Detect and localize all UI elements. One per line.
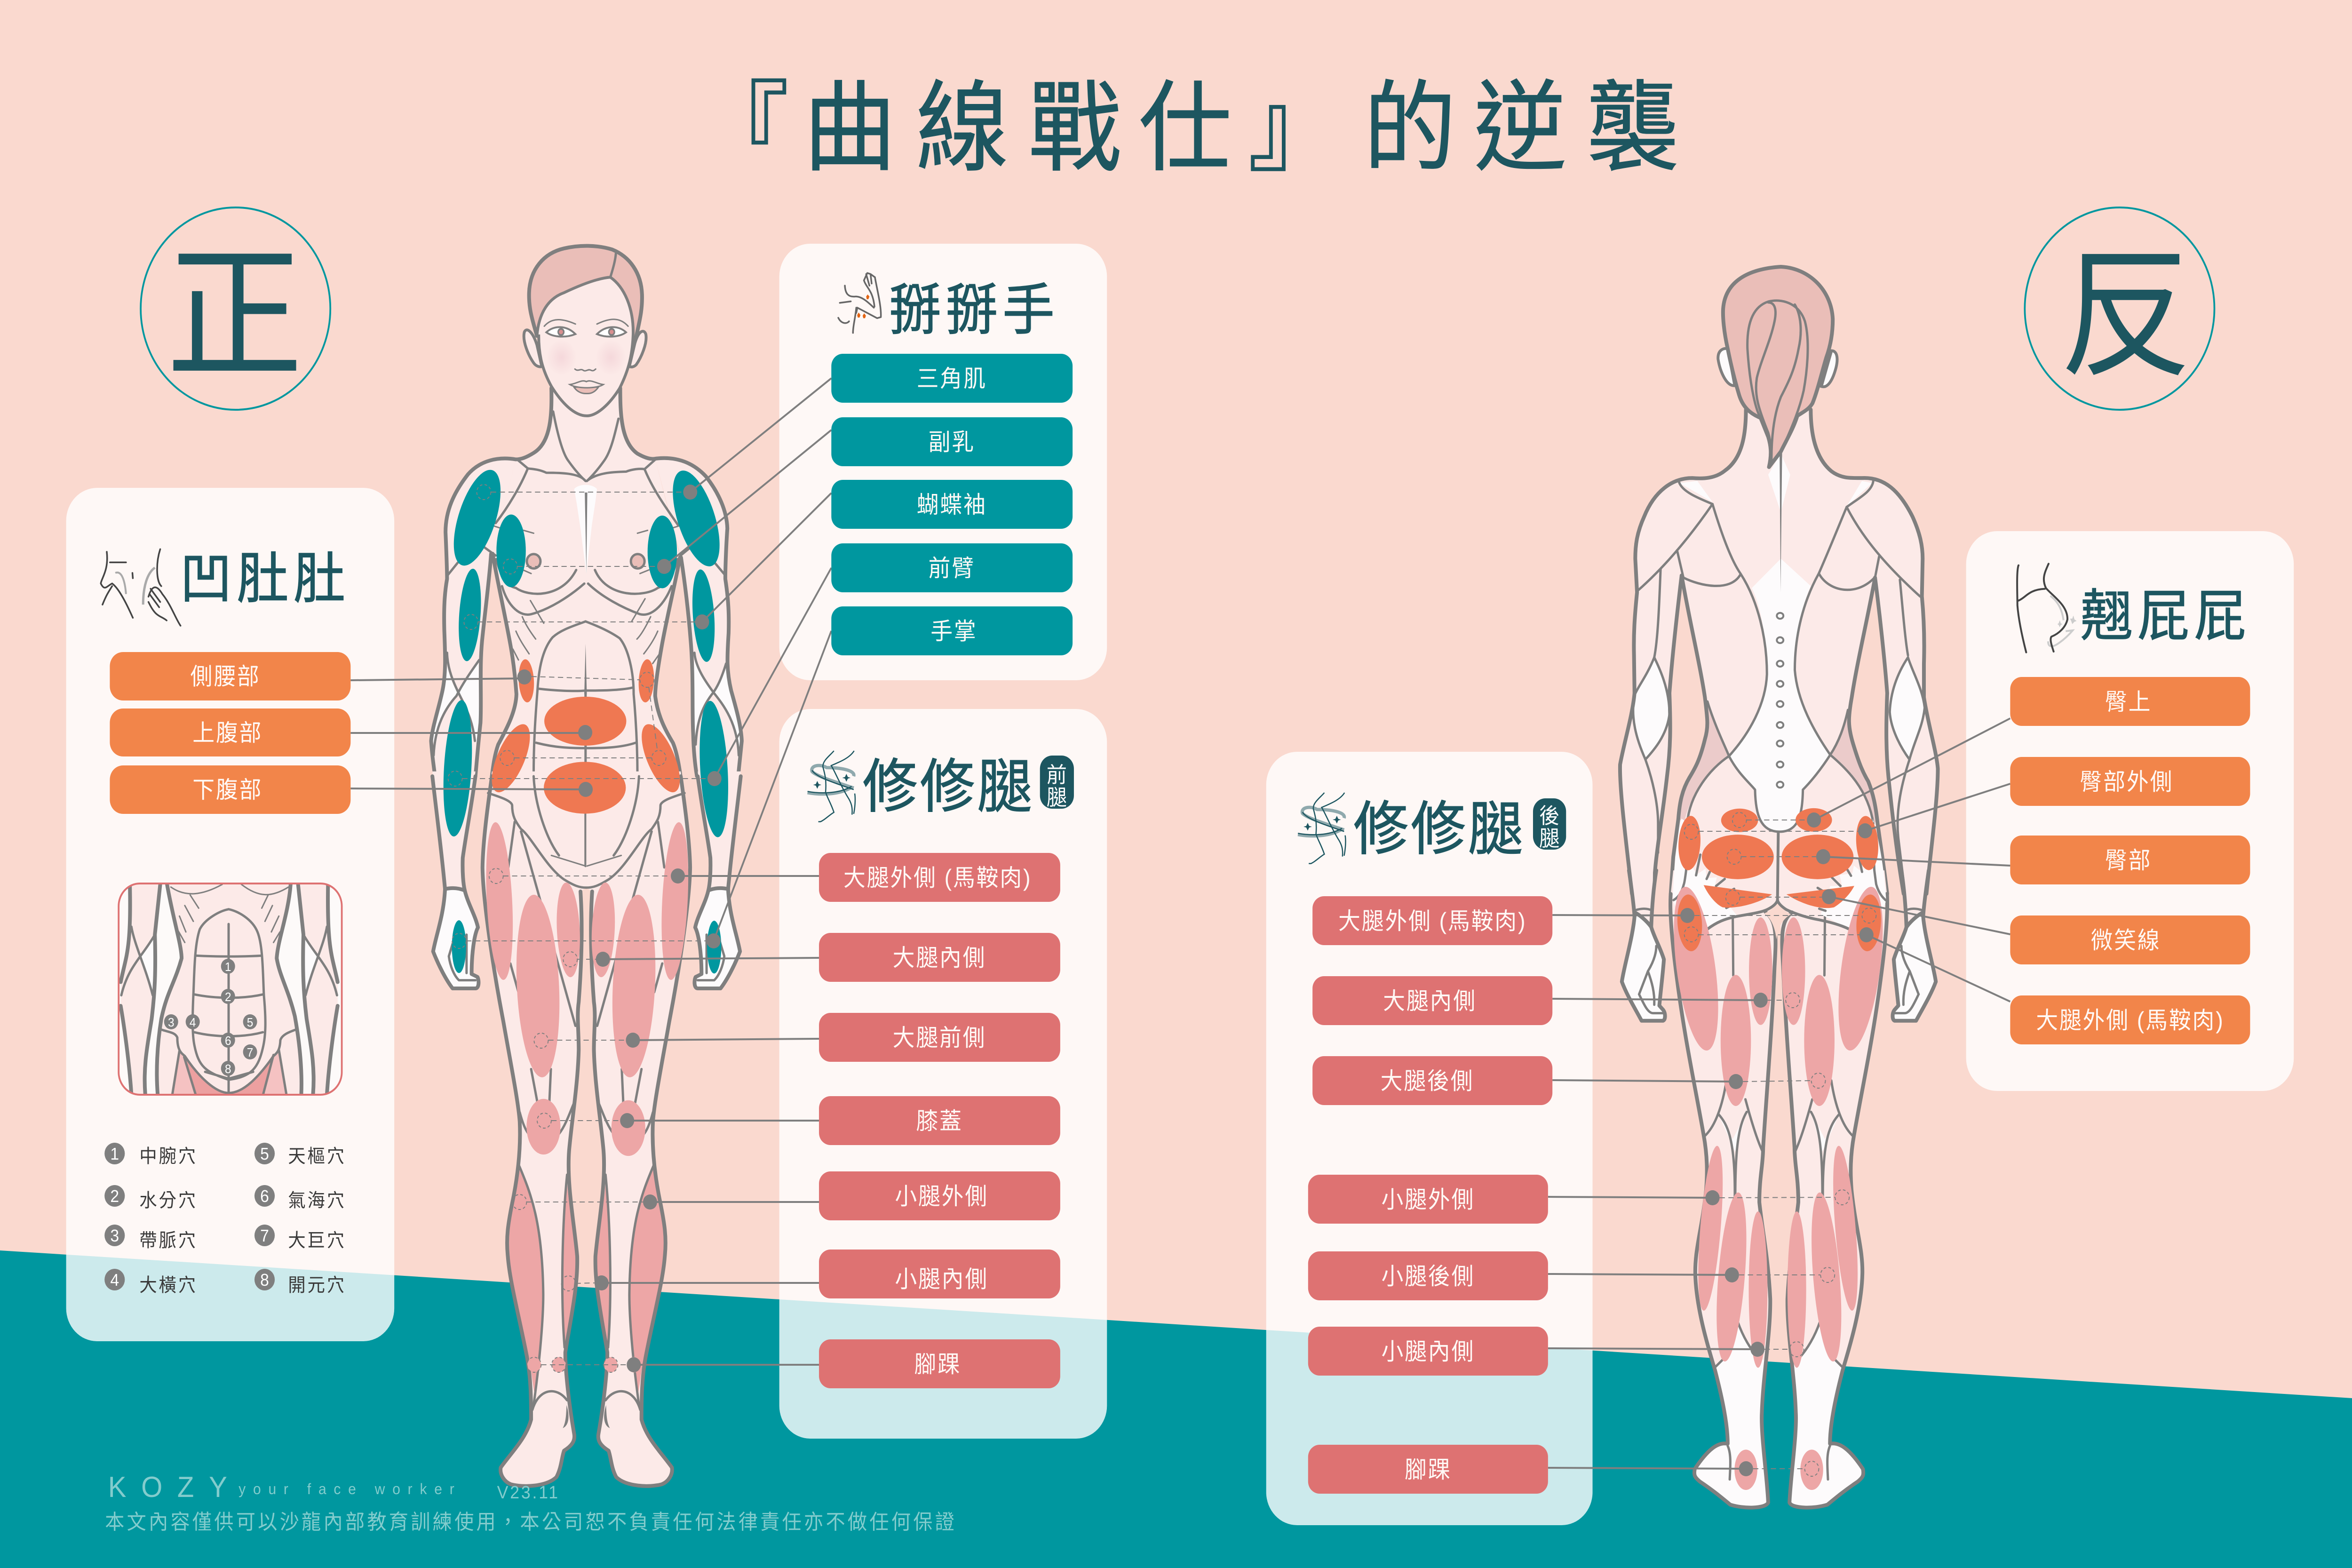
acupoint torso diagram: 8 — [225, 1062, 231, 1076]
sternum highlight — [574, 485, 597, 573]
button: back thigh: 大腿後側 — [1381, 1068, 1474, 1094]
icon: raised arm — [838, 273, 881, 333]
button: palm: 手掌 — [930, 619, 977, 645]
front abdomen muscle zones — [485, 658, 687, 814]
button: outer thigh — [819, 853, 1060, 902]
glute area detail — [1673, 819, 1887, 939]
footer brand — [108, 1471, 558, 1503]
panel: front legs card background — [779, 709, 1107, 1439]
button: glute: 臀部 — [2105, 848, 2152, 874]
button: butterfly sleeve — [831, 480, 1073, 529]
acupoint legend: 6 — [260, 1187, 269, 1206]
spine points — [1777, 613, 1783, 788]
back white and pink zones — [1633, 454, 1925, 832]
back hair — [1723, 267, 1833, 467]
acupoint legend — [104, 1143, 344, 1296]
dashed guides: back figure — [1685, 812, 1876, 1476]
neck and shoulders outline — [431, 388, 742, 776]
back torso and arm fills — [1620, 410, 1938, 899]
title — [696, 73, 1679, 183]
back right leg and hand — [1779, 870, 1936, 1508]
badge: back of leg — [1533, 798, 1566, 851]
button: inner thigh — [1312, 976, 1552, 1025]
back ears — [1718, 349, 1837, 387]
acupoint legend: 大巨穴 — [288, 1230, 344, 1251]
heading: legs back: 修修腿 — [1353, 797, 1523, 862]
acupoint legend: 5 — [260, 1145, 269, 1163]
icon: legs with tape measure — [808, 751, 855, 822]
icon: legs with tape measure — [1298, 793, 1345, 864]
left leg — [483, 772, 586, 1486]
front hand muscle zones — [452, 920, 721, 973]
acupoint legend: 2 — [110, 1187, 119, 1206]
button: outer glute: 臀部外側 — [2080, 769, 2173, 795]
connector lines: front figure — [350, 378, 831, 1365]
connector lines: back figure — [1548, 718, 2010, 1469]
button: lower belly — [110, 765, 350, 814]
button: palm — [831, 606, 1073, 655]
button: front thigh — [819, 1013, 1060, 1062]
button: knee — [819, 1096, 1060, 1145]
panel: belly contents — [101, 548, 350, 1296]
neck and collar lines — [447, 412, 725, 575]
acupoint torso diagram: 5 — [247, 1016, 253, 1029]
button: deltoid — [831, 354, 1073, 403]
acupoint legend: 1 — [110, 1145, 119, 1163]
title: 『曲線戰仕』 — [696, 73, 1341, 183]
acupoint legend: 中腕穴 — [139, 1146, 196, 1167]
button: smile line: 微笑線 — [2091, 928, 2161, 954]
button: smile line — [2010, 915, 2250, 964]
panel: back legs card background — [1266, 752, 1593, 1525]
button: outer calf: 小腿外側 — [1381, 1187, 1475, 1213]
heading: belly: 凹肚肚 — [180, 548, 345, 610]
button: lower belly: 下腹部 — [192, 777, 262, 803]
button: side waist: 側腰部 — [191, 664, 261, 690]
panel: front legs contents — [808, 751, 1074, 1388]
button: inner calf — [1308, 1327, 1548, 1376]
brows nose lips — [544, 320, 575, 326]
abdomen lines — [533, 621, 637, 776]
button: upper belly — [110, 708, 350, 756]
button: inner thigh: 大腿內側 — [1383, 988, 1477, 1014]
acupoint torso diagram: 1 — [225, 960, 231, 974]
acupoint legend: 7 — [260, 1226, 269, 1245]
icon: hands on belly — [101, 549, 181, 626]
face — [537, 277, 633, 416]
title: 的逆襲 — [1364, 73, 1679, 183]
badge: back of leg: 後 — [1539, 804, 1559, 828]
hair — [529, 246, 642, 343]
back left leg and hand — [1622, 870, 1779, 1508]
button: outer thigh — [1312, 896, 1552, 945]
acupoint legend: 3 — [110, 1226, 119, 1245]
acupoint torso diagram: 3 — [168, 1016, 175, 1029]
circle badge: front — [141, 207, 330, 410]
front body figure — [431, 246, 742, 1486]
footer brand: your face worker — [238, 1480, 454, 1497]
button: ankle — [1308, 1445, 1548, 1494]
circle badge: back: 反 — [2059, 236, 2192, 394]
chest lines — [494, 526, 679, 663]
acupoint legend: 氣海穴 — [288, 1190, 344, 1211]
acupoint legend: 開元穴 — [288, 1275, 344, 1296]
ears — [524, 330, 542, 367]
button: outer thigh: 大腿外側 (馬鞍肉) — [2036, 1008, 2225, 1034]
right forearm and hand — [695, 772, 741, 988]
panel: glutes contents — [2010, 564, 2250, 1044]
button: inner thigh — [819, 933, 1060, 982]
back glute orange zones — [1677, 808, 1881, 879]
button: ankle — [819, 1339, 1060, 1388]
button: side waist — [110, 652, 350, 700]
acupoint torso diagram — [119, 883, 342, 1095]
panel: arms contents — [831, 273, 1073, 655]
button: accessory breast — [831, 417, 1073, 466]
torso fill — [490, 388, 683, 780]
acupoint legend: 8 — [260, 1271, 269, 1289]
front arm muscle zones — [440, 460, 732, 839]
panel: back legs contents — [1298, 793, 1566, 1494]
button: outer calf: 小腿外側 — [895, 1184, 988, 1210]
heading: legs: 修修腿 — [863, 755, 1032, 820]
acupoint torso diagram: 7 — [247, 1046, 253, 1059]
back outline strokes — [1620, 410, 1938, 894]
button: front thigh: 大腿前側 — [893, 1025, 986, 1051]
button: outer calf — [1308, 1175, 1548, 1224]
button: accessory breast: 副乳 — [929, 430, 975, 455]
button: inner calf: 小腿內側 — [1381, 1339, 1475, 1365]
inner elbow highlights — [432, 660, 479, 748]
heading: arms: 掰掰手 — [889, 279, 1055, 342]
button: deltoid: 三角肌 — [917, 366, 987, 392]
acupoint legend: 水分穴 — [139, 1190, 196, 1211]
button: back calf — [1308, 1251, 1548, 1300]
badge: front of leg: 腿 — [1047, 786, 1067, 810]
back leg muscle zones — [1665, 880, 1891, 1490]
button: ankle: 腳踝 — [1405, 1457, 1452, 1483]
acupoint torso diagram: 4 — [190, 1016, 196, 1029]
left forearm and hand — [432, 772, 478, 988]
button: outer thigh — [2010, 995, 2250, 1044]
right leg — [586, 772, 690, 1486]
panel: belly card background — [66, 488, 394, 1341]
circle badge: front: 正 — [166, 233, 303, 397]
back body figure — [1620, 267, 1938, 1508]
button: upper glute — [2010, 677, 2250, 726]
button: butterfly sleeve: 蝴蝶袖 — [917, 492, 987, 518]
eyes — [546, 327, 575, 337]
panel: glutes card background — [1966, 531, 2294, 1091]
button: upper belly: 上腹部 — [192, 720, 262, 746]
anchor dots — [517, 485, 1874, 1476]
elbow lines — [434, 653, 739, 756]
footer brand: V23.11 — [497, 1482, 558, 1502]
button: inner calf — [819, 1250, 1060, 1298]
heading: glutes: 翹屁屁 — [2081, 585, 2246, 647]
panel: arms card background — [779, 244, 1107, 680]
icon: hip profile — [2017, 564, 2077, 653]
button: forearm: 前臂 — [929, 556, 975, 581]
footer disclaimer: 本文內容僅供可以沙龍內部教育訓練使用，本公司恕不負責任何法律責任亦不做任何保證 — [105, 1511, 954, 1534]
teal floor band — [0, 1250, 2352, 1568]
badge: front of leg: 前 — [1047, 764, 1067, 787]
acupoint torso diagram: 6 — [225, 1034, 231, 1048]
badge: front of leg — [1040, 756, 1074, 810]
button: back calf: 小腿後側 — [1381, 1264, 1475, 1289]
button: outer thigh: 大腿外側 (馬鞍肉) — [843, 865, 1032, 891]
front leg muscle zones — [483, 820, 692, 1372]
button: back thigh — [1312, 1056, 1552, 1105]
circle badge: back — [2025, 207, 2214, 410]
footer brand: KOZY — [108, 1471, 227, 1503]
acupoint legend: 4 — [110, 1271, 119, 1289]
back muscle lines — [1637, 452, 1920, 882]
button: inner thigh: 大腿內側 — [893, 945, 986, 971]
button: upper glute: 臀上 — [2105, 689, 2152, 715]
button: inner calf: 小腿內側 — [895, 1266, 988, 1292]
button: outer glute — [2010, 757, 2250, 806]
button: outer thigh: 大腿外側 (馬鞍肉) — [1338, 908, 1526, 934]
dashed guides: front figure — [448, 485, 707, 1372]
acupoint legend: 天樞穴 — [288, 1146, 344, 1167]
button: glute — [2010, 836, 2250, 884]
left arm fill — [431, 459, 516, 780]
acupoint legend: 帶脈穴 — [139, 1230, 196, 1251]
button: ankle: 腳踝 — [914, 1352, 961, 1377]
badge: back of leg: 腿 — [1539, 827, 1559, 851]
cheeks — [546, 340, 577, 375]
back upper thigh orange zones — [1675, 885, 1883, 955]
button: knee: 膝蓋 — [916, 1108, 963, 1134]
button: forearm — [831, 543, 1073, 592]
right arm fill — [655, 458, 742, 780]
acupoint legend: 大橫穴 — [139, 1275, 196, 1296]
acupoint torso diagram: 2 — [225, 990, 231, 1004]
button: outer calf — [819, 1171, 1060, 1220]
